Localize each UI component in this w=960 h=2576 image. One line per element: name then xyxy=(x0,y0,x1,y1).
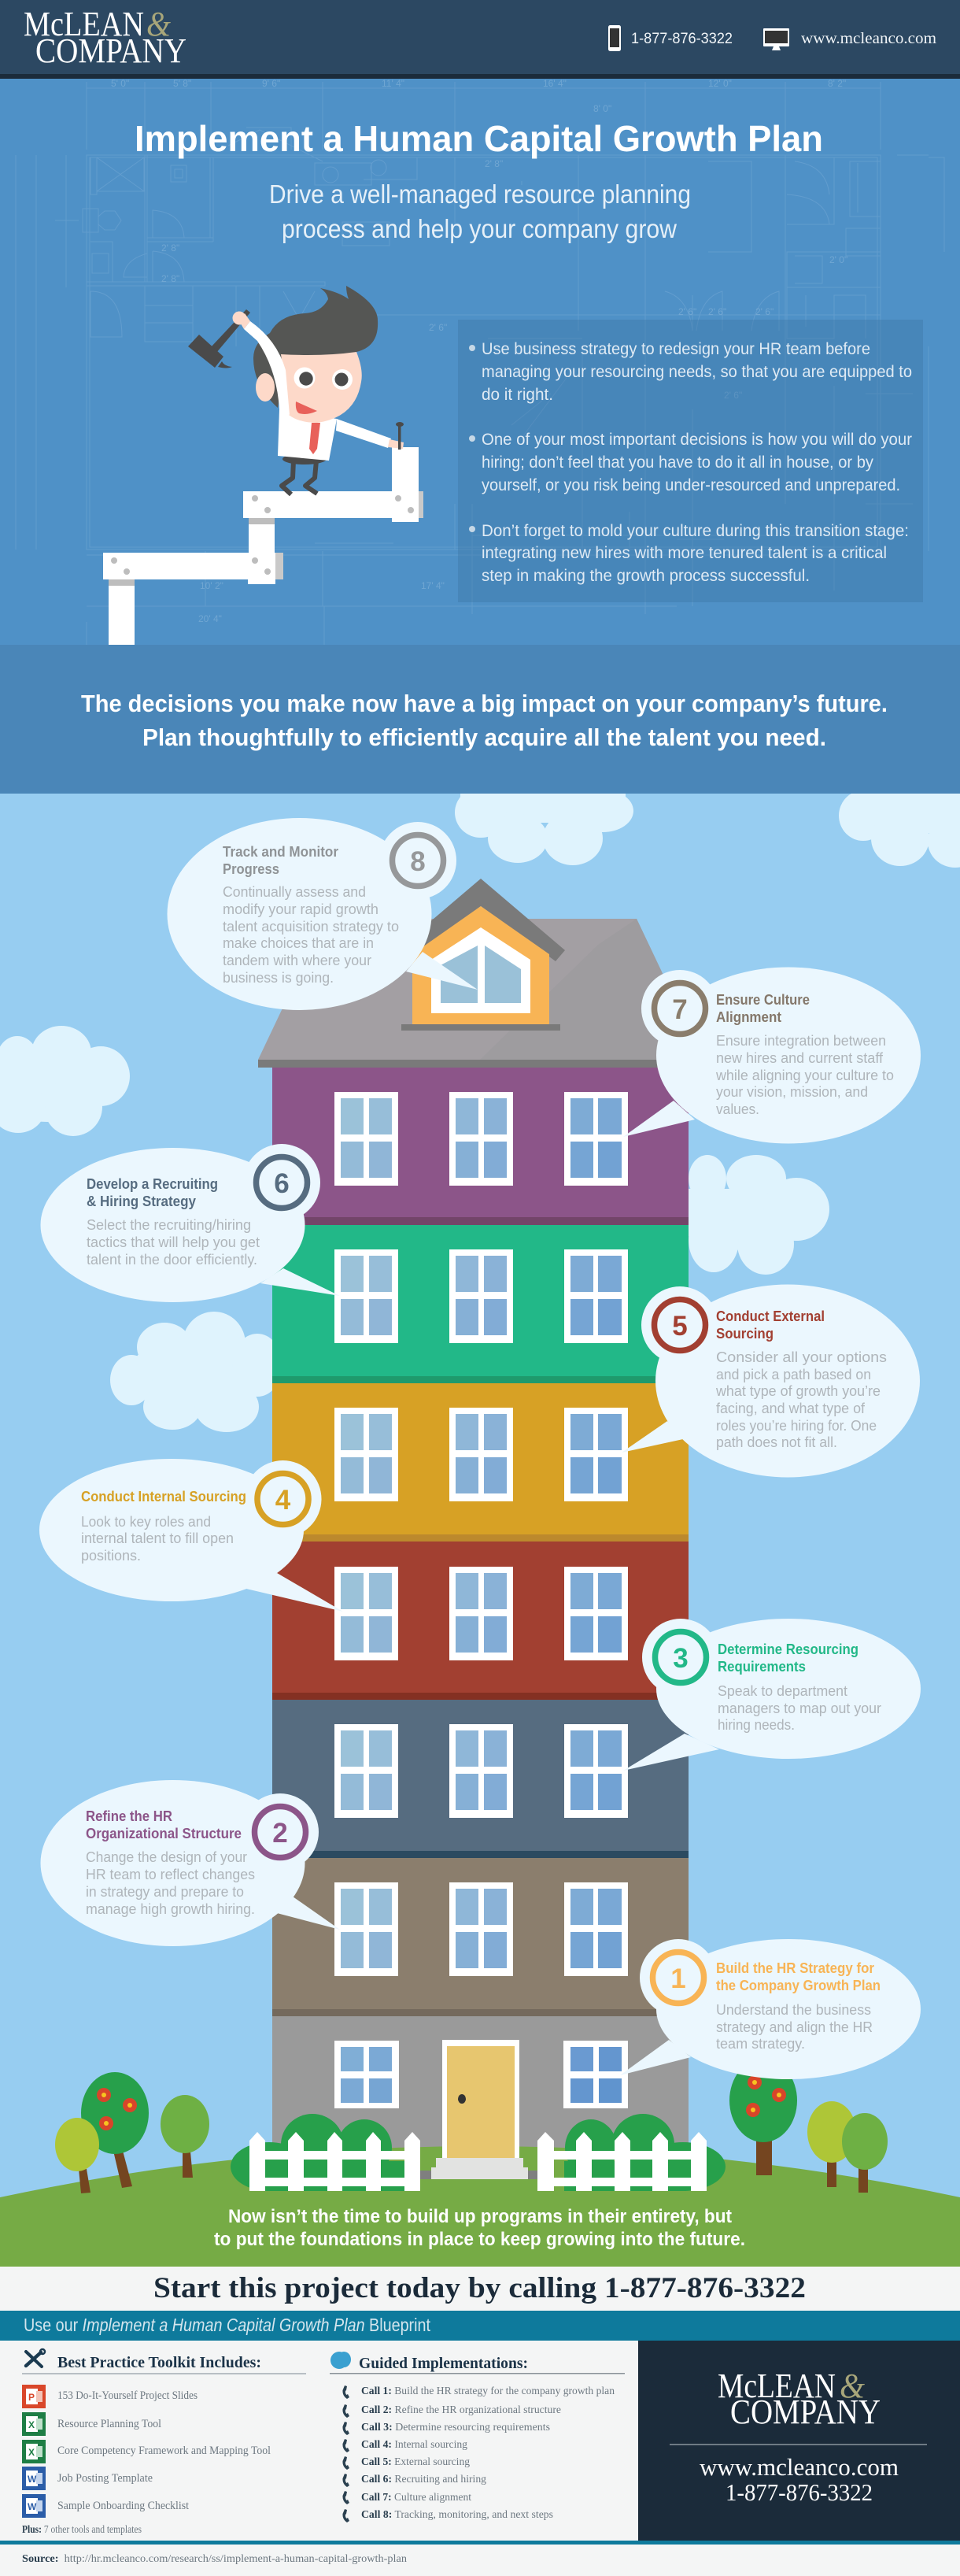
contact logo xyxy=(718,2367,881,2431)
contact website: www.mcleanco.com xyxy=(700,2453,899,2481)
blueprint dimension labels: 2' 6" xyxy=(678,306,696,317)
callout 2: refine the HR organizational structure: in strategy and prepare to xyxy=(86,1884,244,1900)
callout 5: conduct external sourcing: Conduct External xyxy=(716,1308,825,1324)
cloud: left mid xyxy=(110,1312,282,1432)
callout 1: build the HR strategy xyxy=(620,1939,921,2079)
item: onboarding checklist: Sample Onboarding Checklist xyxy=(57,2500,189,2512)
ground xyxy=(0,2146,960,2267)
callout 2: refine the HR organizational structure: HR team to reflect changes xyxy=(86,1867,255,1882)
item: project slides: P xyxy=(28,2392,35,2403)
callout 7: ensure culture alignment: 7 xyxy=(672,994,688,1025)
house xyxy=(258,879,703,2193)
callout 8: track and monitor: Progress xyxy=(223,861,279,877)
closing message on grass: Now isn’t the time to build up programs in their entirety, but xyxy=(228,2206,732,2227)
bullet one: managing your resourcing needs, so that you are equipped to xyxy=(482,363,912,381)
item: project slides: 153 Do-It-Yourself Project Slides xyxy=(57,2389,198,2402)
callout 2: refine the HR organizational structure: 2 xyxy=(272,1818,288,1849)
callout 5: conduct external sourcing: path does not fit all. xyxy=(716,1434,837,1450)
contact phone: 1-877-876-3322 xyxy=(726,2478,873,2506)
call list: Call 6: Recruiting and hiring xyxy=(361,2473,486,2485)
note: other tools: Plus: 7 other tools and templates xyxy=(22,2523,142,2535)
blueprint dimension labels: 8' 2" xyxy=(828,78,846,89)
callout 8: track and monitor: Continually assess and xyxy=(223,884,366,900)
callout 1: build the HR strategy: strategy and align the HR xyxy=(716,2019,873,2035)
closing message on grass xyxy=(214,2206,745,2250)
callout 3: determine resourcing requirements xyxy=(623,1619,921,1771)
trees: right group xyxy=(729,2059,888,2193)
illustration: scaffold beams xyxy=(103,447,423,645)
item: job posting template: Job Posting Template xyxy=(57,2472,153,2485)
callout 5: conduct external sourcing: roles you’re hiring for. One xyxy=(716,1418,877,1434)
icon: monitor xyxy=(763,28,789,50)
blueprint dimension labels: 2' 6" xyxy=(708,306,726,317)
callout 7: ensure culture alignment: Ensure integration between xyxy=(716,1033,886,1049)
closing message on grass: to put the foundations in place to keep growing into the future. xyxy=(214,2229,745,2250)
blueprint dimension labels: 2' 0" xyxy=(829,254,847,265)
title: Implement a Human Capital Growth Plan xyxy=(135,118,823,159)
contact logo: McLEAN xyxy=(718,2367,836,2405)
bullet one xyxy=(469,340,912,404)
toolkit heading: Best Practice Toolkit Includes: xyxy=(57,2354,261,2371)
blueprint dimension labels: 11' 4" xyxy=(382,78,404,89)
callout 1: build the HR strategy: the Company Growth Plan xyxy=(716,1978,881,1993)
bullet three: step in making the growth process successful. xyxy=(482,567,810,585)
guided heading: Guided Implementations: xyxy=(359,2355,528,2372)
call list: Call 2: Refine the HR organizational structure xyxy=(361,2404,561,2415)
bullet one: do it right. xyxy=(482,386,553,404)
logo: McLean & Company: McLEAN xyxy=(24,5,144,43)
windows: purple floor xyxy=(334,1092,628,1186)
bullet two: hiring; don’t feel that you have to do it all in house, or by xyxy=(482,453,873,472)
blueprint dimension labels: 2' 6" xyxy=(429,322,447,333)
band: key message: The decisions you make now have a big impact on your company’s future. xyxy=(81,690,888,717)
callout 7: ensure culture alignment: Ensure Culture xyxy=(716,992,810,1008)
source line: Source: http://hr.mcleanco.com/research/ss/implement-a-human-capital-growth-plan xyxy=(22,2552,407,2564)
bushes: left xyxy=(231,2114,404,2191)
callout 2: refine the HR organizational structure: Change the design of your xyxy=(86,1849,247,1865)
contact logo: COMPANY xyxy=(730,2393,881,2431)
windows: slate floor xyxy=(334,1724,628,1818)
item: onboarding checklist xyxy=(22,2494,189,2518)
cloud: top right xyxy=(839,787,960,868)
item: resource planning tool xyxy=(22,2412,161,2436)
blueprint dimension labels: 2' 8" xyxy=(161,242,179,254)
blueprint dimension labels: 16' 4" xyxy=(543,78,567,89)
windows: red floor xyxy=(334,1567,628,1660)
trees: left group xyxy=(55,2072,209,2193)
callout 1: build the HR strategy: team strategy. xyxy=(716,2036,805,2052)
item: job posting template xyxy=(22,2467,153,2490)
panel: contact xyxy=(638,2341,960,2541)
callout 2: refine the HR organizational structure: Organizational Structure xyxy=(86,1826,242,1841)
blueprint dimension labels: 5' 8" xyxy=(173,78,191,89)
callout 2: refine the HR organizational structure xyxy=(41,1780,340,1946)
blueprint floor plan background xyxy=(16,82,944,661)
cloud: top middle xyxy=(455,787,633,865)
roof xyxy=(258,919,703,1068)
logo: McLean & Company: & xyxy=(146,5,172,43)
callout 8: track and monitor xyxy=(167,818,478,1010)
callout 8: track and monitor: make choices that are in xyxy=(223,935,374,951)
callout 7: ensure culture alignment xyxy=(623,967,921,1143)
callout 2: refine the HR organizational structure: manage high growth hiring. xyxy=(86,1901,255,1917)
front door and steps xyxy=(420,2040,537,2179)
callout 2: refine the HR organizational structure: Refine the HR xyxy=(86,1808,172,1824)
callout 3: determine resourcing requirements: Speak to department xyxy=(718,1683,847,1699)
logo: McLean & Company: COMPANY xyxy=(35,31,186,70)
picket fence: left xyxy=(249,2132,420,2191)
windows: yellow floor xyxy=(334,1408,628,1501)
blueprint dimension labels: 10' 2" xyxy=(200,580,223,591)
blueprint dimension labels: 2' 6" xyxy=(755,306,774,317)
call list xyxy=(342,2385,615,2522)
illustration: businessman with hammer xyxy=(188,286,404,494)
callout 8: track and monitor: 8 xyxy=(410,846,426,877)
item: competency framework: Core Competency Framework and Mapping Tool xyxy=(57,2445,271,2457)
icon: speech bubbles xyxy=(330,2352,351,2369)
call list: Call 1: Build the HR strategy for the company growth plan xyxy=(361,2385,615,2396)
bullet three xyxy=(469,522,909,585)
windows: ground floor xyxy=(334,2041,628,2108)
blueprint dimension labels xyxy=(111,78,847,624)
header bar xyxy=(0,0,960,79)
item: competency framework xyxy=(22,2440,271,2463)
subtitle xyxy=(269,180,691,243)
blueprint dimension labels: 8' 0" xyxy=(593,103,611,114)
callout 5: conduct external sourcing: 5 xyxy=(672,1311,688,1342)
callout 5: conduct external sourcing: and pick a path based on xyxy=(716,1367,871,1382)
contact logo: & xyxy=(840,2367,866,2405)
blueprint dimension labels: 2' 6" xyxy=(724,390,742,401)
callout 7: ensure culture alignment: values. xyxy=(716,1101,759,1117)
cloud: left upper xyxy=(0,1026,130,1136)
house body floors xyxy=(272,1068,689,2193)
blueprint dimension labels: 2' 8" xyxy=(485,158,503,169)
callout 7: ensure culture alignment: new hires and current staff xyxy=(716,1050,884,1066)
logo: McLean & Company xyxy=(24,5,186,70)
callout 3: determine resourcing requirements: Requirements xyxy=(718,1659,806,1675)
bullet three: Don’t forget to mold your culture during this transition stage: xyxy=(482,522,909,540)
callout 6: recruiting and hiring strategy: Select the recruiting/hiring xyxy=(87,1217,251,1233)
panel: resources background xyxy=(0,2341,638,2541)
callout 8: track and monitor: tandem with where your xyxy=(223,953,371,968)
callout 4: conduct internal sourcing xyxy=(39,1459,343,1612)
callout 8: track and monitor: talent acquisition strategy to xyxy=(223,919,399,935)
callout 5: conduct external sourcing xyxy=(622,1285,920,1477)
bullet two: One of your most important decisions is how you will do your xyxy=(482,431,912,449)
bullet two: yourself, or you risk being under-resourced and unprepared. xyxy=(482,476,900,494)
callout 3: determine resourcing requirements: managers to map out your xyxy=(718,1701,881,1716)
blueprint dimension labels: 5' 0" xyxy=(111,78,129,89)
callout 5: conduct external sourcing: Sourcing xyxy=(716,1326,774,1342)
callout 3: determine resourcing requirements: Determine Resourcing xyxy=(718,1641,858,1657)
callout 8: track and monitor: Track and Monitor xyxy=(223,844,338,860)
band: call to action xyxy=(0,2267,960,2311)
call list: Call 8: Tracking, monitoring, and next steps xyxy=(361,2508,553,2520)
panel: best practice toolkit xyxy=(22,2349,306,2535)
callout 5: conduct external sourcing: what type of growth you’re xyxy=(715,1383,881,1399)
callout 1: build the HR strategy: Build the HR Strategy for xyxy=(716,1960,874,1976)
callout 6: recruiting and hiring strategy: & Hiring Strategy xyxy=(87,1194,196,1209)
callout 8: track and monitor: business is going. xyxy=(223,970,334,986)
blueprint dimension labels: 17' 4" xyxy=(421,580,445,591)
callout 7: ensure culture alignment: Alignment xyxy=(716,1009,781,1025)
callout 6: recruiting and hiring strategy: talent in the door efficiently. xyxy=(87,1252,257,1268)
item: project slides xyxy=(22,2385,198,2408)
band: key message: Plan thoughtfully to efficiently acquire all the talent you need. xyxy=(142,724,826,751)
band: blueprint heading xyxy=(0,2311,960,2341)
panel: guided implementations xyxy=(330,2352,625,2522)
call list: Call 3: Determine resourcing requirements xyxy=(361,2421,550,2433)
band: key message xyxy=(0,645,960,794)
band: blueprint heading: Use our Implement a Human Capital Growth Plan Blueprint xyxy=(24,2315,431,2335)
callout 4: conduct internal sourcing: Conduct Internal Sourcing xyxy=(81,1489,246,1505)
callout 4: conduct internal sourcing: positions. xyxy=(81,1548,141,1564)
callout 5: conduct external sourcing: facing, and what type of xyxy=(716,1401,866,1416)
blueprint dimension labels: 12' 0" xyxy=(708,78,732,89)
icon: phone xyxy=(608,25,621,51)
callout 4: conduct internal sourcing: Look to key roles and xyxy=(81,1514,211,1530)
callout 1: build the HR strategy: Understand the business xyxy=(716,2002,871,2018)
icon: tools xyxy=(26,2349,45,2367)
panel: blueprint hero xyxy=(0,78,960,661)
blueprint dimension labels: 9' 6" xyxy=(262,78,280,89)
bushes: right xyxy=(564,2114,726,2191)
header website: www.mcleanco.com xyxy=(801,30,936,47)
bullet three: integrating new hires with more tenured talent is a critical xyxy=(482,544,887,562)
cloud: right mid xyxy=(685,1155,829,1275)
item: resource planning tool: X xyxy=(28,2419,35,2430)
callout 7: ensure culture alignment: your vision, mission, and xyxy=(716,1084,868,1100)
callout 3: determine resourcing requirements: hiring needs. xyxy=(718,1717,795,1733)
call list: Call 7: Culture alignment xyxy=(361,2491,471,2503)
callout 6: recruiting and hiring strategy: Develop a Recruiting xyxy=(87,1176,218,1192)
item: job posting template: W xyxy=(28,2474,37,2485)
windows: green floor xyxy=(334,1249,628,1343)
item: competency framework: X xyxy=(28,2447,35,2458)
bullet two xyxy=(469,431,912,494)
callout 6: recruiting and hiring strategy: tactics that will help you get xyxy=(87,1234,260,1250)
callout 4: conduct internal sourcing: internal talent to fill open xyxy=(81,1530,234,1546)
callout 4: conduct internal sourcing: 4 xyxy=(275,1485,291,1516)
subtitle: Drive a well-managed resource planning xyxy=(269,180,691,209)
blueprint dimension labels: 20' 4" xyxy=(198,613,222,624)
subtitle: process and help your company grow xyxy=(282,214,677,243)
item: onboarding checklist: W xyxy=(28,2501,37,2512)
windows: taupe floor xyxy=(334,1882,628,1976)
call list: Call 4: Internal sourcing xyxy=(361,2438,467,2450)
blueprint dimension labels: 2' 8" xyxy=(161,273,179,284)
band: call to action: Start this project today by calling 1-877-876-3322 xyxy=(153,2272,806,2304)
panel: key points xyxy=(458,320,923,602)
item: resource planning tool: Resource Planning Tool xyxy=(57,2418,161,2430)
callout 6: recruiting and hiring strategy: 6 xyxy=(274,1168,290,1199)
callout 5: conduct external sourcing: Consider all your options xyxy=(716,1349,887,1365)
footer xyxy=(0,2541,960,2576)
panel: sky backdrop xyxy=(0,787,960,2204)
bullet one: Use business strategy to redesign your HR team before xyxy=(482,340,870,358)
callout 8: track and monitor: modify your rapid growth xyxy=(223,901,378,917)
call list: Call 5: External sourcing xyxy=(361,2456,470,2467)
header phone number: 1-877-876-3322 xyxy=(631,31,733,47)
callout 6: recruiting and hiring strategy xyxy=(41,1144,340,1302)
callout 3: determine resourcing requirements: 3 xyxy=(673,1643,689,1674)
dormer window xyxy=(397,879,565,1031)
callout 1: build the HR strategy: 1 xyxy=(670,1963,686,1994)
picket fence: right xyxy=(537,2132,707,2191)
callout 7: ensure culture alignment: while aligning your culture to xyxy=(715,1068,894,1083)
